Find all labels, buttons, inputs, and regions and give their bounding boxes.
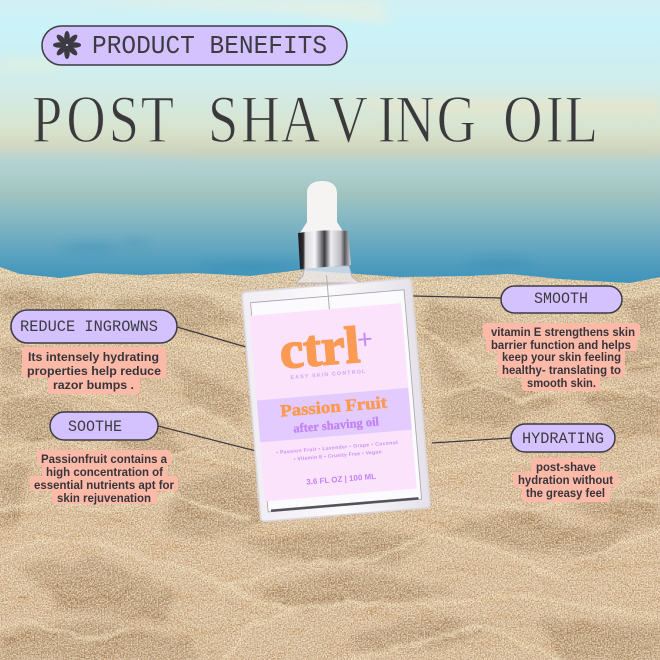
silver collar <box>298 230 351 269</box>
ingredients: • Passion Fruit • Lavender • Grape • Coconut <box>276 440 398 456</box>
callout: reduce ingrowns <box>11 310 177 394</box>
product type: after shaving oil <box>293 414 380 436</box>
text: soothe description: essential nutrients apt for <box>34 478 174 492</box>
volume: 3.6 FL OZ | 100 ML <box>306 472 377 487</box>
text: smooth description: keep your skin feeling <box>502 350 621 364</box>
callout: soothe: SOOTHE <box>68 418 122 436</box>
bottle neck <box>296 266 360 283</box>
text: hydrating description <box>513 458 618 502</box>
text: reduce ingrowns description: razor bumps . <box>53 378 134 392</box>
title: POST SHAVING OIL <box>32 82 598 157</box>
background: sky and sea <box>0 0 660 290</box>
text: reduce ingrowns description: properties help reduce <box>27 364 161 378</box>
logo: ctrl <box>277 317 362 380</box>
icon: flower <box>53 31 81 59</box>
text: hydrating description: post-shave <box>536 460 596 474</box>
text: soothe description: Passionfruit contains a <box>41 452 167 466</box>
connector lines <box>158 296 511 451</box>
text: soothe description: high concentration of <box>46 465 164 479</box>
text: smooth description: barrier function and helps <box>491 338 631 352</box>
header pill: product benefits: PRODUCT BENEFITS <box>92 31 327 61</box>
bottle body <box>242 278 430 522</box>
flavour name: Passion Fruit <box>279 393 388 421</box>
text: hydrating description: the greasy feel <box>526 486 605 500</box>
callout: hydrating <box>511 424 618 502</box>
text: reduce ingrowns description <box>22 347 166 394</box>
callout: smooth <box>483 286 640 391</box>
text: soothe description <box>30 450 178 505</box>
text: hydrating description: hydration without <box>518 473 613 487</box>
text: reduce ingrowns description: Its intensely hydrating <box>28 350 159 364</box>
product label <box>250 303 417 501</box>
ingredients <box>276 440 399 464</box>
header pill: product benefits <box>42 26 347 65</box>
background: sand dunes <box>0 260 660 660</box>
ingredients: • Vitamin E • Cruelty Free • Vegan <box>294 449 382 463</box>
dropper bulb <box>300 181 344 233</box>
callout: smooth: SMOOTH <box>534 290 588 308</box>
tagline: EASY SKIN CONTROL <box>290 369 366 381</box>
product: dropper bottle <box>241 181 430 522</box>
logo plus: + <box>356 324 374 355</box>
text: smooth description: vitamin E strengthens skin <box>491 325 635 339</box>
text: soothe description: skin rejuvenation <box>57 491 151 505</box>
callout: reduce ingrowns: REDUCE INGROWNS <box>20 318 158 336</box>
callout: hydrating: HYDRATING <box>522 430 604 448</box>
callout: soothe <box>30 412 178 505</box>
text: smooth description <box>483 323 640 391</box>
text: smooth description: healthy- translating to <box>502 363 621 377</box>
text: smooth description: smooth skin. <box>527 376 596 390</box>
